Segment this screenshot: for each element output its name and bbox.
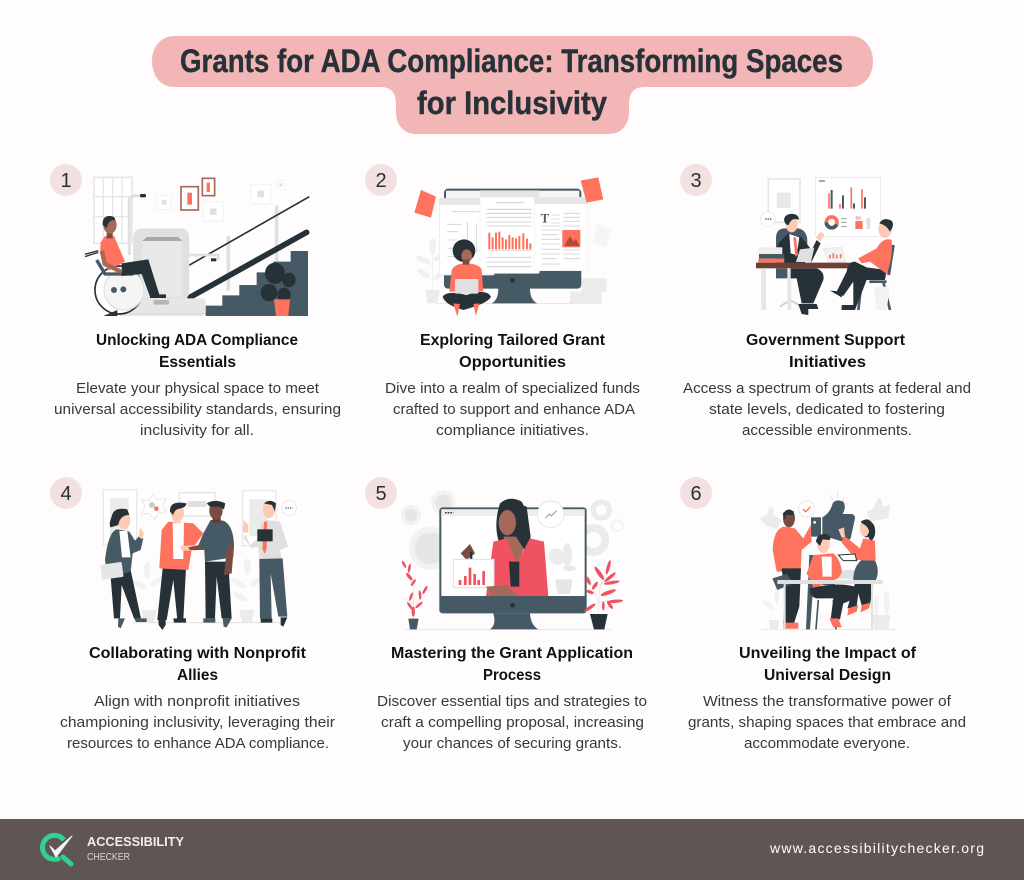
heading 5: Process [483,667,541,684]
body text 2: crafted to support and enhance ADA [393,401,635,418]
number badge 2: 2 [375,170,387,192]
illustration: team with thumbs up [760,491,895,629]
body text 5: craft a compelling proposal, increasing [381,714,644,731]
number badge 5: 5 [375,483,387,505]
panel: step 5 [365,477,647,752]
number badge 6: 6 [690,483,702,505]
body text 1: universal accessibility standards, ensuring [54,401,341,418]
number badge 2 [365,164,397,196]
heading 4 [89,645,307,684]
heading 6: Universal Design [764,667,891,684]
panel: step 6 [680,477,966,752]
title [152,36,873,134]
footer bar [0,819,1024,880]
panel: step 1 [50,164,341,439]
illustration: grant documents on monitor [414,177,611,317]
website url: www.accessibilitychecker.org [769,840,984,856]
number badge 1 [50,164,82,196]
body text 3: accessible environments. [742,422,912,439]
heading 4: Collaborating with Nonprofit [89,645,307,662]
illustration: nonprofit allies handshake [100,490,296,630]
body text 4: resources to enhance ADA compliance. [67,735,329,752]
panel: step 2 [365,164,640,439]
panel: step 3 [680,164,971,439]
body text 3: state levels, dedicated to fostering [709,401,945,418]
heading 6: Unveiling the Impact of [739,645,917,662]
heading 2: Exploring Tailored Grant [420,332,606,349]
heading 6 [739,645,917,684]
heading 3: Initiatives [789,354,866,371]
brand name: ACCESSIBILITY [87,834,184,849]
heading 1 [96,332,298,371]
panel: step 4 [50,477,335,752]
body text 2: Dive into a realm of specialized funds [385,380,640,397]
body text 4: Align with nonprofit initiatives [94,693,300,710]
body text 4: championing inclusivity, leveraging their [60,714,335,731]
body text 1: Elevate your physical space to meet [76,380,320,397]
brand name: CHECKER [87,852,130,863]
body text 6: grants, shaping spaces that embrace and [688,714,966,731]
body text 4 [60,693,335,752]
body text 2 [385,380,640,439]
icon: accessibility checker logo [43,835,72,864]
body text 6 [688,693,966,752]
body text 5 [377,693,647,752]
number badge 4: 4 [60,483,72,505]
number badge 6 [680,477,712,509]
number badge 1: 1 [60,170,72,192]
body text 6: Witness the transformative power of [703,693,952,710]
heading 3: Government Support [746,332,906,349]
body text 1 [54,380,341,439]
heading 3 [746,332,906,371]
illustration: government meeting: 50 [855,215,861,221]
body text 2: compliance initiatives. [436,422,589,439]
number badge 5 [365,477,397,509]
heading 5 [391,645,633,684]
heading 1: Unlocking ADA Compliance [96,332,298,349]
illustration: presenter on monitor [401,490,623,629]
illustration: grant documents on monitor: T [541,212,550,226]
body text 5: Discover essential tips and strategies to [377,693,647,710]
brand name [87,834,184,863]
heading 5: Mastering the Grant Application [391,645,633,662]
body text 3: Access a spectrum of grants at federal and [683,380,971,397]
body text 3 [683,380,971,439]
body text 5: your chances of securing grants. [403,735,622,752]
number badge 3: 3 [690,170,702,192]
heading 4: Allies [177,667,218,684]
heading 2: Opportunities [459,354,566,371]
title: for Inclusivity [417,85,607,121]
body text 1: inclusivity for all. [140,422,254,439]
illustration: wheelchair stair lift [85,177,309,316]
title: Grants for ADA Compliance: Transforming Spaces [180,43,843,79]
illustration: government meeting [756,177,893,315]
heading 1: Essentials [159,354,236,371]
body text 6: accommodate everyone. [744,735,910,752]
number badge 3 [680,164,712,196]
heading 2 [420,332,606,371]
number badge 4 [50,477,82,509]
